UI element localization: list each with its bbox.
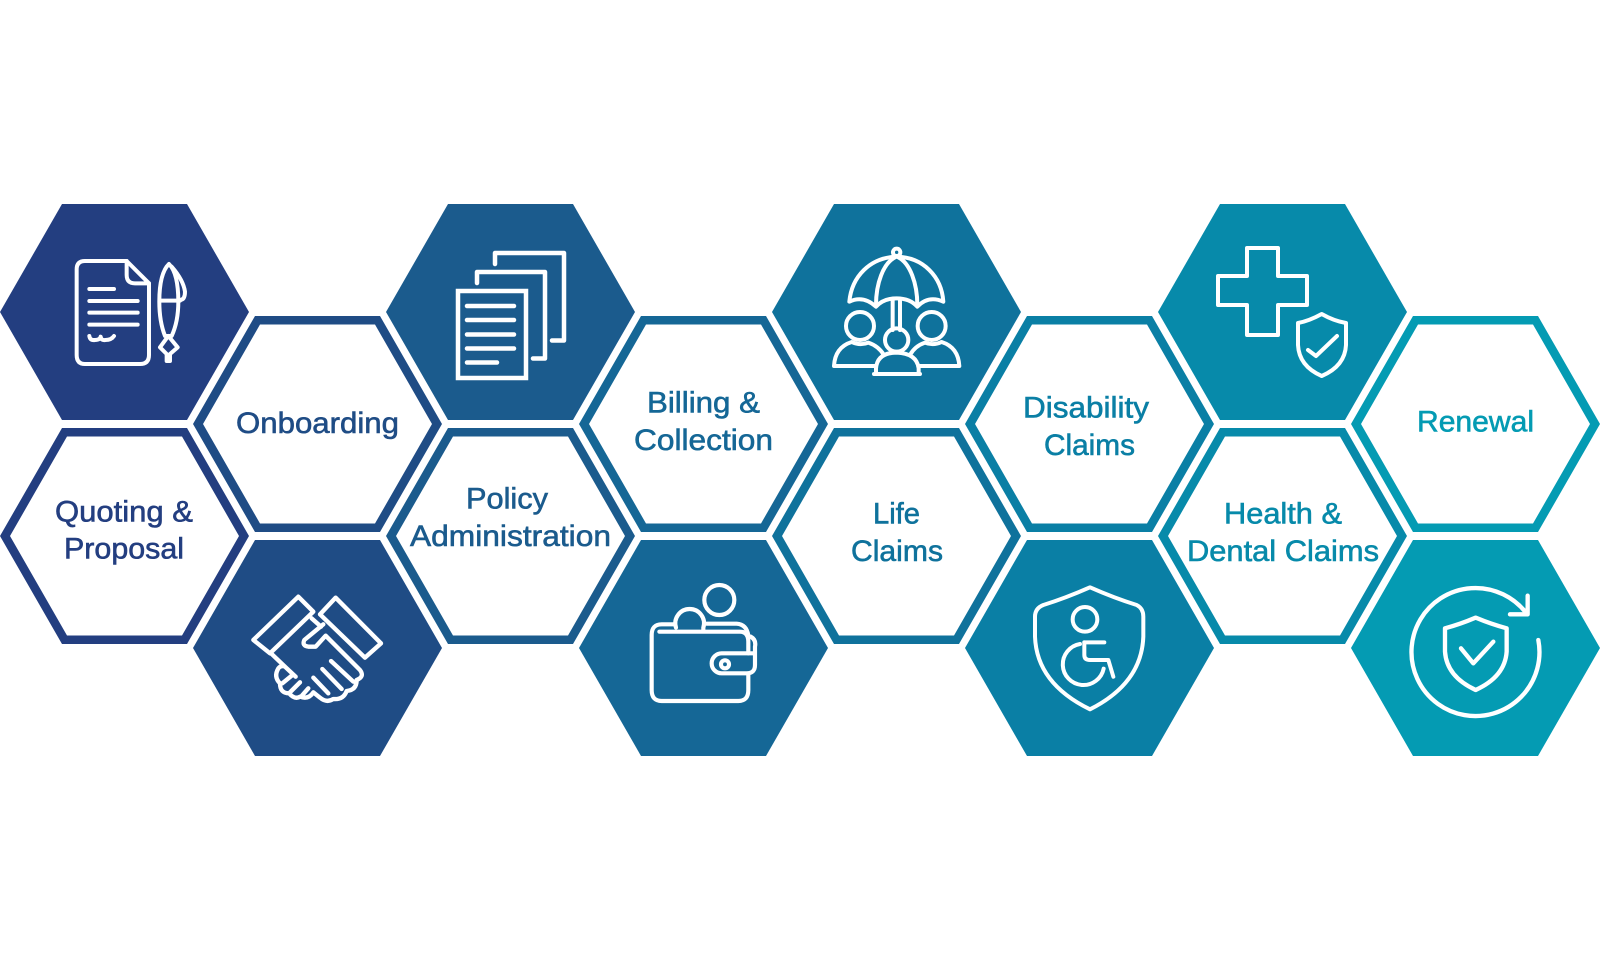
icon: document and fountain pen xyxy=(77,261,185,364)
stage: policy administration icon hexagon xyxy=(386,204,635,420)
label: Health & Dental Claims xyxy=(1187,498,1379,568)
label: Disability Claims xyxy=(1023,392,1149,462)
icon: medical cross with shield xyxy=(1218,248,1346,376)
label: Billing & Collection xyxy=(634,386,773,457)
label: Health & Dental Claims: Dental Claims xyxy=(1187,535,1379,568)
label: Policy Administration: Administration xyxy=(410,520,611,553)
label: Onboarding: Onboarding xyxy=(236,407,399,440)
icon: shield with wheelchair user xyxy=(1035,587,1143,709)
icon: circular arrow around shield xyxy=(1411,588,1539,716)
stage: onboarding label hexagon xyxy=(193,316,442,532)
stage: quoting and proposal icon hexagon xyxy=(0,204,249,420)
icon: handshake xyxy=(253,597,381,701)
label: Health & Dental Claims: Health & xyxy=(1224,498,1342,530)
stage: billing and collection label hexagon xyxy=(579,316,828,532)
label: Quoting & Proposal: Proposal xyxy=(64,532,184,566)
stage: billing and collection icon hexagon xyxy=(579,540,828,756)
icon: wallet with coins xyxy=(652,585,755,701)
stage: disability claims label hexagon xyxy=(965,316,1214,532)
label: Renewal: Renewal xyxy=(1417,406,1534,438)
label: Disability Claims: Claims xyxy=(1044,429,1135,462)
label: Quoting & Proposal: Quoting & xyxy=(55,496,193,528)
label: Policy Administration: Policy xyxy=(466,482,548,516)
stage: health and dental claims label hexagon xyxy=(1158,428,1407,644)
stage: renewal icon hexagon xyxy=(1351,540,1600,756)
stage: quoting and proposal label hexagon xyxy=(0,428,249,644)
icon: umbrella over three people xyxy=(834,249,959,374)
label: Billing & Collection: Billing & xyxy=(647,386,760,420)
label: Quoting & Proposal xyxy=(55,496,193,566)
stage: renewal label hexagon xyxy=(1351,316,1600,532)
label: Policy Administration xyxy=(410,482,611,553)
label: Life Claims: Claims xyxy=(851,535,943,568)
stage: health and dental claims icon hexagon xyxy=(1158,204,1407,420)
stage: disability claims icon hexagon xyxy=(965,540,1214,756)
stage: policy administration label hexagon xyxy=(386,428,635,644)
label: Billing & Collection: Collection xyxy=(634,424,773,457)
icon: stacked documents xyxy=(458,253,564,378)
stage: life claims label hexagon xyxy=(772,428,1021,644)
stage: onboarding icon hexagon xyxy=(193,540,442,756)
label: Life Claims xyxy=(851,498,943,568)
label: Disability Claims: Disability xyxy=(1023,392,1149,424)
label: Life Claims: Life xyxy=(873,498,920,530)
stage: life claims icon hexagon xyxy=(772,204,1021,420)
